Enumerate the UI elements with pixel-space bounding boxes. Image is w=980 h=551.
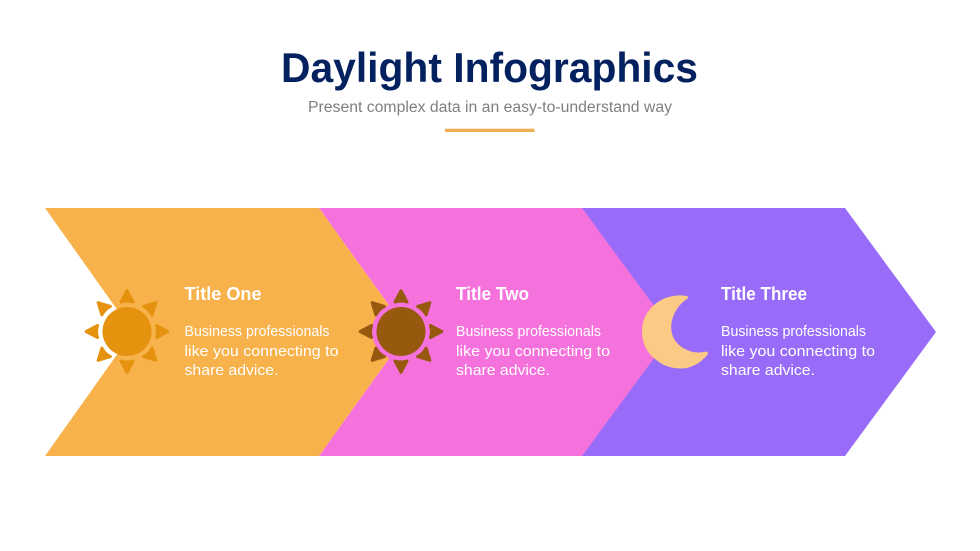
body: step two description: Business professionals	[456, 324, 601, 340]
title: Daylight Infographics	[281, 44, 698, 91]
accent underline	[445, 129, 534, 132]
body: step two description	[456, 324, 610, 379]
body: step three description	[721, 324, 875, 379]
body: step one description: Business professionals	[184, 324, 330, 340]
body: step one description: like you connecting to	[184, 344, 338, 360]
subtitle: Present complex data in an easy-to-understand way	[308, 99, 672, 116]
heading: title two: Title Two	[456, 284, 529, 304]
icon: orange sun	[86, 291, 168, 372]
body: step one description: share advice.	[184, 363, 278, 379]
body: step two description: share advice.	[456, 363, 550, 379]
text block: step three	[721, 284, 875, 379]
icon: brown sun	[360, 291, 442, 372]
panel: step three purple arrow	[582, 208, 936, 456]
panel: step two pink arrow	[319, 208, 660, 456]
body: step three description: Business professionals	[721, 324, 866, 340]
panel: step one orange arrow	[45, 208, 408, 456]
text block: step two	[456, 284, 610, 379]
heading: title one: Title One	[184, 284, 262, 304]
body: step three description: share advice.	[721, 363, 815, 379]
body: step one description	[184, 324, 338, 379]
heading: title three: Title Three	[721, 284, 807, 304]
body: step three description: like you connecting to	[721, 344, 875, 360]
body: step two description: like you connecting to	[456, 344, 610, 360]
text block: step one	[184, 284, 338, 379]
icon: crescent moon	[642, 295, 708, 368]
